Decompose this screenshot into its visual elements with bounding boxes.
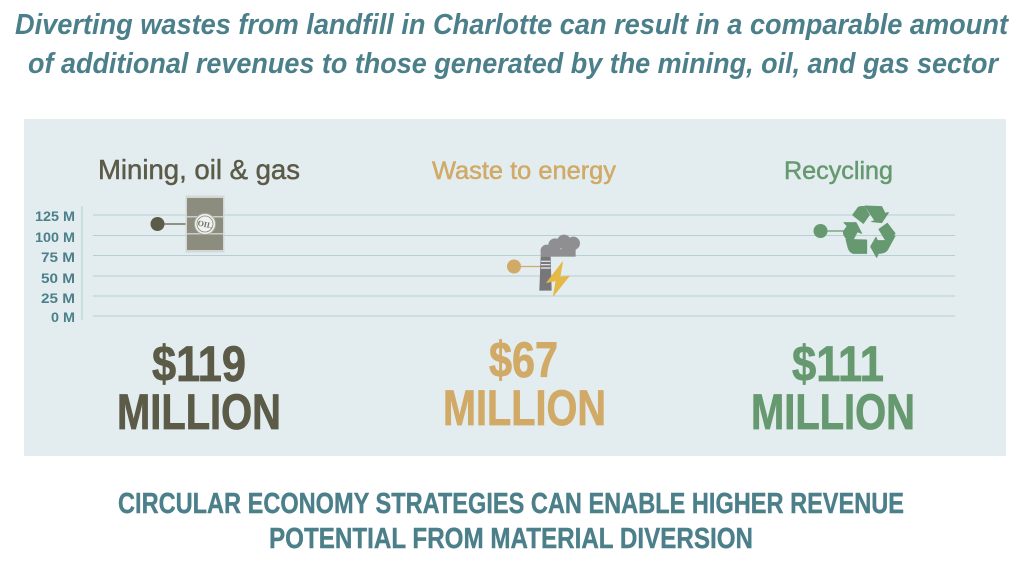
value: recycling $111 million: MILLION — [751, 384, 915, 440]
axis labels: 75 M — [41, 249, 75, 265]
panel: chart background — [24, 119, 1006, 456]
value: recycling $111 million: $111 — [792, 336, 884, 392]
axis labels: 100 M — [35, 229, 75, 245]
marker: waste to energy value — [507, 260, 541, 274]
value: recycling $111 million — [751, 336, 915, 440]
axis labels: 25 M — [41, 290, 75, 306]
value: waste to energy $67 million: MILLION — [443, 380, 606, 436]
icon: recycling symbol — [843, 206, 895, 257]
marker: recycling value — [814, 224, 846, 238]
value: mining $119 million: MILLION — [117, 384, 281, 440]
heading: mining, oil and gas: Mining, oil & gas — [98, 154, 300, 185]
marker: mining value — [150, 217, 188, 231]
axis labels: 50 M — [41, 270, 75, 286]
icon: oil barrel: OIL — [197, 219, 213, 230]
axis labels: 125 M — [35, 208, 75, 224]
conclusion text — [118, 488, 904, 555]
title — [15, 9, 1009, 80]
axis labels — [35, 208, 75, 325]
value: waste to energy $67 million — [443, 332, 606, 436]
icon: smokestack with lightning bolt — [539, 235, 580, 296]
value: mining $119 million — [117, 336, 281, 440]
heading: waste to energy: Waste to energy — [432, 157, 617, 185]
conclusion text: POTENTIAL FROM MATERIAL DIVERSION — [269, 523, 753, 555]
value: waste to energy $67 million: $67 — [489, 332, 558, 388]
value: mining $119 million: $119 — [152, 336, 246, 392]
icon: oil barrel — [186, 196, 224, 252]
chart axis and gridlines — [82, 206, 955, 320]
heading: recycling: Recycling — [784, 157, 893, 185]
axis labels: 0 M — [51, 309, 75, 325]
